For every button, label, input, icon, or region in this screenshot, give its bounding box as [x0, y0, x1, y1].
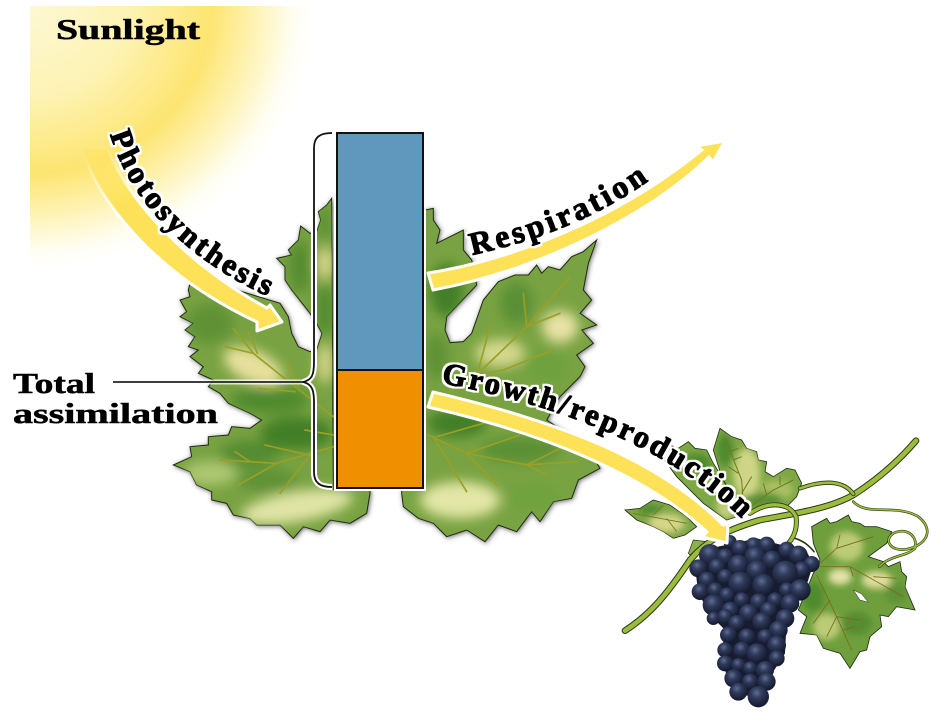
grape cluster [689, 535, 820, 707]
stacked bar: respiration and growth [334, 130, 426, 491]
bracket for total assimilation [113, 133, 332, 487]
label: sunlight: Sunlight [56, 15, 201, 46]
grape vine illustration [625, 428, 927, 707]
bar segment: respiration [337, 133, 423, 370]
arrow: photosynthesis [83, 148, 282, 331]
vine leaf: large right [798, 515, 915, 668]
curved label: respiration: Respiration [465, 170, 649, 258]
vine leaf: top centre [713, 428, 802, 510]
curved label: growth and reproduction: Growth/reproduction [442, 362, 752, 518]
curved label: photosynthesis: Photosynthesis [108, 125, 272, 297]
bar segment: growth and reproduction [337, 370, 423, 488]
sunlight glow [30, 6, 330, 268]
label: total assimilation: Total [13, 369, 95, 400]
arrow: growth and reproduction [428, 392, 728, 543]
arrow: respiration [428, 141, 725, 290]
label: total assimilation: assimilation [13, 399, 219, 430]
leaf veins: right [428, 277, 577, 492]
leaf: left half [173, 198, 370, 538]
label: total assimilation [13, 369, 219, 430]
vine leaf: behind arrow [664, 441, 736, 520]
leaf: right half [402, 208, 600, 542]
vine leaf: small left [625, 500, 697, 538]
vine leaf: small under arrow [688, 540, 707, 555]
leaf veins: left [220, 328, 333, 493]
vine stem and tendrils [625, 441, 927, 631]
central grape leaf [173, 198, 600, 542]
